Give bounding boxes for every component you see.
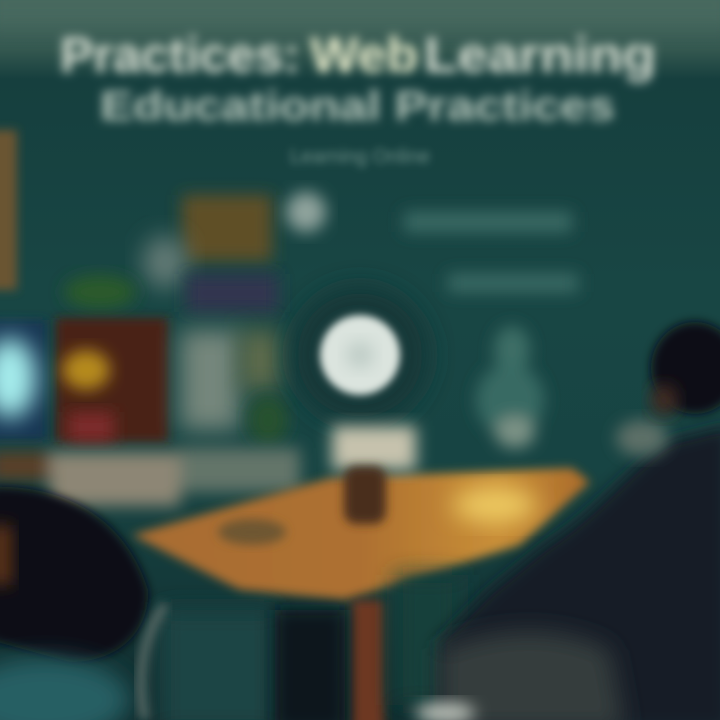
title: Learning [424, 27, 656, 83]
sleeve highlight [440, 631, 625, 720]
outline figure [476, 326, 544, 448]
ear and face [650, 384, 678, 416]
collar [616, 420, 668, 456]
clock badge [290, 285, 430, 425]
pale books [180, 330, 240, 430]
ceiling band [0, 0, 720, 30]
table leg [352, 600, 384, 720]
title: Educational Practices [100, 82, 615, 129]
green plant [64, 275, 136, 309]
title [60, 27, 656, 129]
desk notebook [218, 519, 286, 545]
subtitle: Learning Online [290, 146, 430, 168]
pale object [143, 236, 187, 288]
body [440, 425, 720, 720]
shoe [415, 702, 475, 720]
shelf plant [248, 396, 288, 444]
monitor [0, 320, 46, 440]
upper yellow books [182, 195, 272, 261]
desk cup [344, 466, 386, 524]
bookshelf cluster [56, 192, 326, 444]
title: Web [310, 27, 418, 83]
left wall panel [0, 130, 17, 290]
white wall icon [286, 192, 326, 232]
head [651, 322, 720, 414]
seated person [415, 322, 720, 720]
right wall text blocks [404, 212, 578, 292]
table glow [453, 488, 537, 522]
table top [132, 468, 590, 600]
table [132, 426, 590, 720]
yellow shelf item [62, 350, 110, 390]
low counter [0, 448, 300, 506]
red shelf item [68, 412, 114, 442]
left chair [0, 487, 148, 662]
red-brown shelf [56, 318, 168, 442]
laptop screen [332, 426, 416, 470]
title: Practices: [60, 27, 300, 83]
purple books [186, 274, 278, 312]
floor foreground [0, 575, 460, 720]
